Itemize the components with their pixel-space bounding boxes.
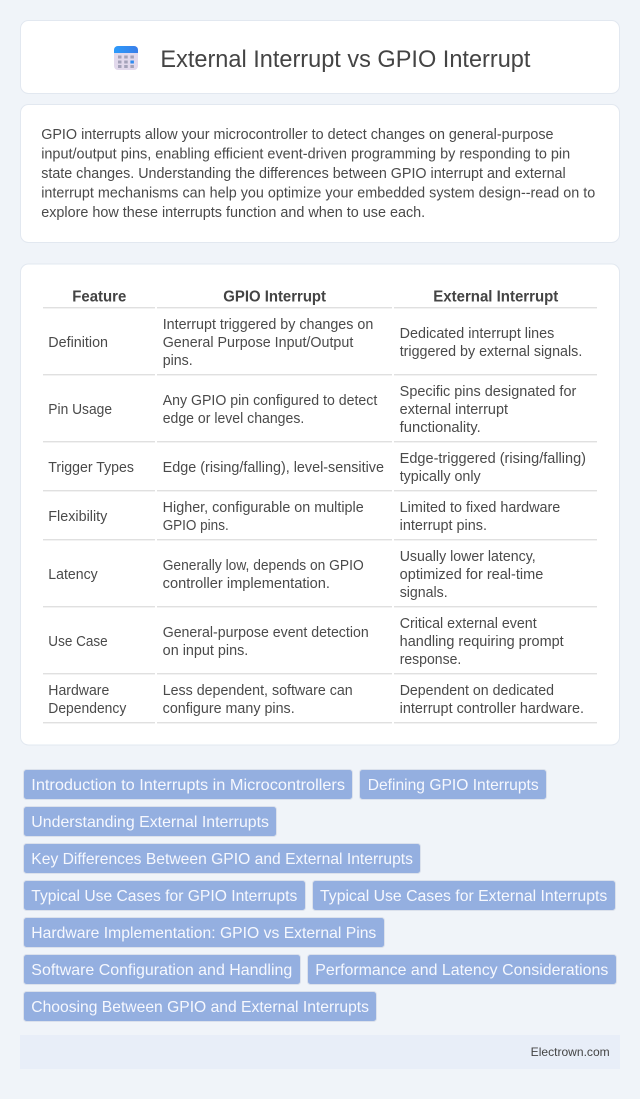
table row: definition: Interrupt triggered by changes on	[163, 317, 373, 333]
tag: understanding external: Understanding External Interrupts	[31, 814, 269, 831]
table row: pin usage: edge or level changes.	[163, 411, 304, 427]
text block: introduction paragraph: state changes. Understanding the differences between GPIO interrupt and external	[41, 166, 566, 182]
tag: introduction: Introduction to Interrupts in Microcontrollers	[31, 777, 345, 794]
tag: external use cases	[312, 880, 616, 910]
table row: hardware dependency: Less dependent, software can	[163, 683, 353, 699]
panel: introduction	[20, 104, 620, 242]
title: External Interrupt vs GPIO Interrupt	[160, 46, 531, 73]
table row: hardware dependency: Dependent on dedicated	[400, 683, 554, 699]
text block: introduction paragraph: explore how these interrupts function and when to use each.	[41, 205, 425, 221]
table row: hardware dependency: configure many pins.	[163, 701, 295, 717]
table row: use case: on input pins.	[163, 643, 248, 659]
text block: introduction paragraph	[41, 127, 595, 221]
table row: hardware dependency: interrupt controller hardware.	[400, 701, 584, 717]
panel: title card	[20, 20, 620, 94]
footer credit: Electrown.com	[531, 1045, 610, 1059]
tag: hardware implementation	[24, 918, 384, 948]
footer	[20, 1035, 620, 1069]
tag: key differences: Key Differences Between GPIO and External Interrupts	[31, 851, 413, 868]
tag: performance and latency: Performance and Latency Considerations	[315, 962, 608, 979]
table row: definition	[48, 317, 582, 369]
table row: use case: handling requiring prompt	[400, 634, 564, 650]
table row: hardware dependency: Dependency	[48, 701, 127, 717]
tag: defining GPIO: Defining GPIO Interrupts	[368, 777, 539, 794]
table row: definition: General Purpose Input/Output	[163, 335, 353, 351]
table row: trigger types	[48, 451, 586, 485]
table row: definition: pins.	[163, 353, 193, 369]
table header row: External Interrupt	[433, 289, 559, 306]
icon: calendar	[114, 46, 138, 70]
tag: hardware implementation: Hardware Implementation: GPIO vs External Pins	[31, 925, 376, 942]
tag: performance and latency	[308, 954, 616, 984]
tag: external use cases: Typical Use Cases for External Interrupts	[320, 888, 607, 905]
table header row: GPIO Interrupt	[223, 289, 327, 306]
table header row: Feature	[72, 289, 126, 306]
table row: latency: controller implementation.	[163, 576, 330, 592]
tag: software configuration: Software Configuration and Handling	[31, 962, 292, 979]
table row: pin usage: external interrupt	[400, 402, 508, 418]
tag: choosing between	[24, 992, 376, 1022]
tag: key differences	[24, 844, 420, 874]
tag: choosing between: Choosing Between GPIO and External Interrupts	[31, 999, 369, 1016]
panel: topic tags	[24, 770, 616, 1022]
table row: hardware dependency	[48, 683, 584, 717]
table row: trigger types: Trigger Types	[48, 460, 134, 476]
table row: flexibility	[48, 500, 560, 534]
table row: flexibility: Limited to fixed hardware	[400, 500, 560, 516]
table row: pin usage: Pin Usage	[48, 402, 112, 418]
table row: trigger types: Edge (rising/falling), level-sensitive	[163, 460, 384, 476]
table row: latency: Usually lower latency,	[400, 549, 536, 565]
table row: flexibility: GPIO pins.	[163, 518, 229, 534]
table row: use case: response.	[400, 652, 461, 668]
tag: GPIO use cases	[24, 880, 306, 910]
table row: use case	[48, 616, 564, 668]
table row: flexibility: Flexibility	[48, 509, 108, 525]
tag: defining GPIO	[360, 770, 546, 800]
text block: introduction paragraph: GPIO interrupts allow your microcontroller to detect changes on general-purpose	[41, 127, 553, 143]
tag: introduction	[24, 770, 352, 800]
table row: flexibility: Higher, configurable on multiple	[163, 500, 364, 516]
table row: use case: Critical external event	[400, 616, 537, 632]
table row: use case: General-purpose event detection	[163, 625, 369, 641]
table row: latency: Latency	[48, 567, 99, 583]
table row: flexibility: interrupt pins.	[400, 518, 487, 534]
table row: trigger types: Edge-triggered (rising/falling)	[400, 451, 586, 467]
panel: comparison table	[20, 264, 620, 745]
text block: introduction paragraph: interrupt mechanisms can help you optimize your embedded system design--read on to	[41, 186, 595, 202]
tag: GPIO use cases: Typical Use Cases for GPIO Interrupts	[31, 888, 297, 905]
table row: latency	[48, 549, 543, 601]
table row: hardware dependency: Hardware	[48, 683, 109, 699]
table row: pin usage	[48, 384, 577, 436]
table row: use case: Use Case	[48, 634, 108, 650]
tag: software configuration	[24, 954, 300, 984]
table header row	[72, 289, 559, 306]
table row: definition: Dedicated interrupt lines	[400, 326, 554, 342]
table row: definition: Definition	[48, 335, 108, 351]
table row: latency: optimized for real-time	[400, 567, 543, 583]
table row: trigger types: typically only	[400, 469, 482, 485]
tag: understanding external	[24, 806, 276, 836]
table row: pin usage: Any GPIO pin configured to detect	[163, 393, 377, 409]
table row: definition: triggered by external signals.	[400, 344, 582, 360]
table row: pin usage: functionality.	[400, 420, 481, 436]
table row: pin usage: Specific pins designated for	[400, 384, 577, 400]
text block: introduction paragraph: input/output pins, enabling efficient event-driven programming by responding to pin	[41, 146, 570, 162]
table row: latency: Generally low, depends on GPIO	[163, 558, 364, 574]
table row: latency: signals.	[400, 585, 448, 601]
